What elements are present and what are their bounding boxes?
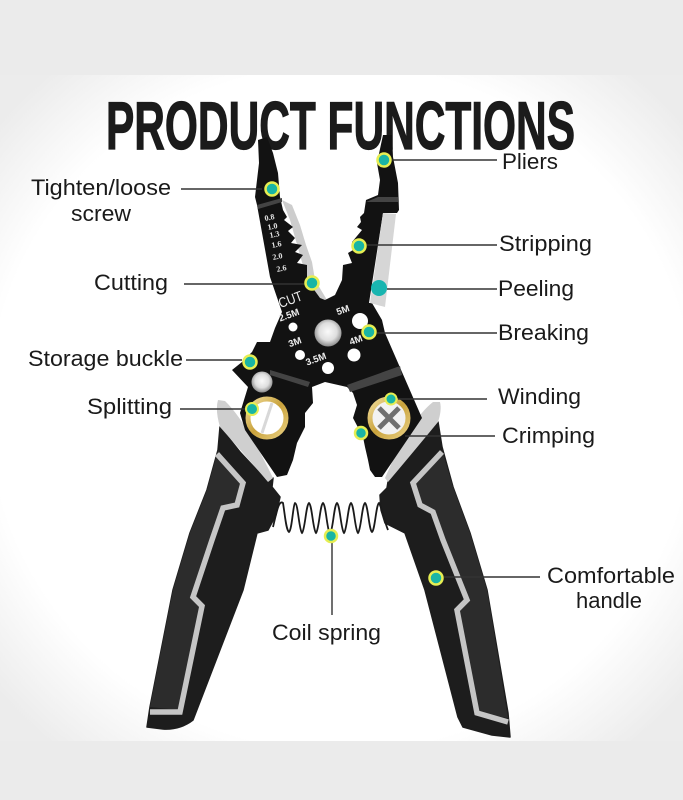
callout: storage buckle: Storage buckle <box>28 346 183 371</box>
hole size markings: 3.5M <box>304 351 328 368</box>
steel ball latch <box>252 372 272 392</box>
right grey blade <box>385 402 441 482</box>
gauge numbers: 1.0 <box>267 221 278 232</box>
hole size markings: 3M <box>287 335 303 350</box>
callout: stripping <box>352 231 592 256</box>
gauge numbers: 2.0 <box>272 251 283 262</box>
callout: coil spring: Coil spring <box>272 620 381 645</box>
callout: crimping: Crimping <box>502 423 595 448</box>
callout: peeling <box>371 276 574 301</box>
gauge numbers <box>264 212 287 274</box>
callout: breaking: Breaking <box>498 320 589 345</box>
right brass screw <box>370 399 408 437</box>
callout: cutting: Cutting <box>94 270 168 295</box>
callout: pliers: Pliers <box>502 149 558 174</box>
callout: crimping <box>355 423 595 448</box>
callout: comfortable handle: handle <box>576 588 642 613</box>
callout: splitting: Splitting <box>87 394 172 419</box>
callout: breaking <box>362 320 589 345</box>
pivot rivet <box>314 320 342 346</box>
callout: coil spring <box>272 530 381 645</box>
callout: cutting <box>94 270 318 295</box>
gauge numbers: 0.8 <box>264 212 275 223</box>
wire gauge holes <box>288 313 368 374</box>
callout: splitting <box>87 394 258 419</box>
callout: pliers <box>378 149 558 174</box>
hole size markings <box>276 288 364 368</box>
callout: storage buckle <box>28 346 256 371</box>
hole size markings: 4M <box>348 333 364 348</box>
gauge numbers: 1.6 <box>271 239 282 250</box>
hole size markings: CUT <box>276 288 305 311</box>
callout: stripping: Stripping <box>499 231 592 256</box>
callout: comfortable handle <box>430 563 675 613</box>
coil spring <box>273 502 388 534</box>
left brass screw <box>248 399 286 437</box>
callout: winding <box>386 384 581 409</box>
illustration: wire pliers <box>147 135 510 737</box>
silver stripping teeth <box>282 200 327 300</box>
right handle <box>380 422 510 737</box>
peeling blade <box>370 213 396 307</box>
callout: tighten/loose screw: Tighten/loose <box>31 175 171 200</box>
hole size markings: 2.5M <box>277 307 301 324</box>
jaw bands <box>257 197 402 392</box>
callout: peeling: Peeling <box>498 276 574 301</box>
gauge numbers: 1.3 <box>269 229 280 240</box>
callout: tighten/loose screw: screw <box>71 201 131 226</box>
left handle <box>147 427 280 729</box>
gauge numbers: 2.6 <box>276 263 287 274</box>
callout: winding: Winding <box>498 384 581 409</box>
hole size markings: 5M <box>335 303 351 318</box>
left grey blade <box>217 400 273 482</box>
callout: comfortable handle: Comfortable <box>547 563 675 588</box>
callout: tighten/loose screw <box>31 175 278 226</box>
plier head body <box>232 135 422 477</box>
